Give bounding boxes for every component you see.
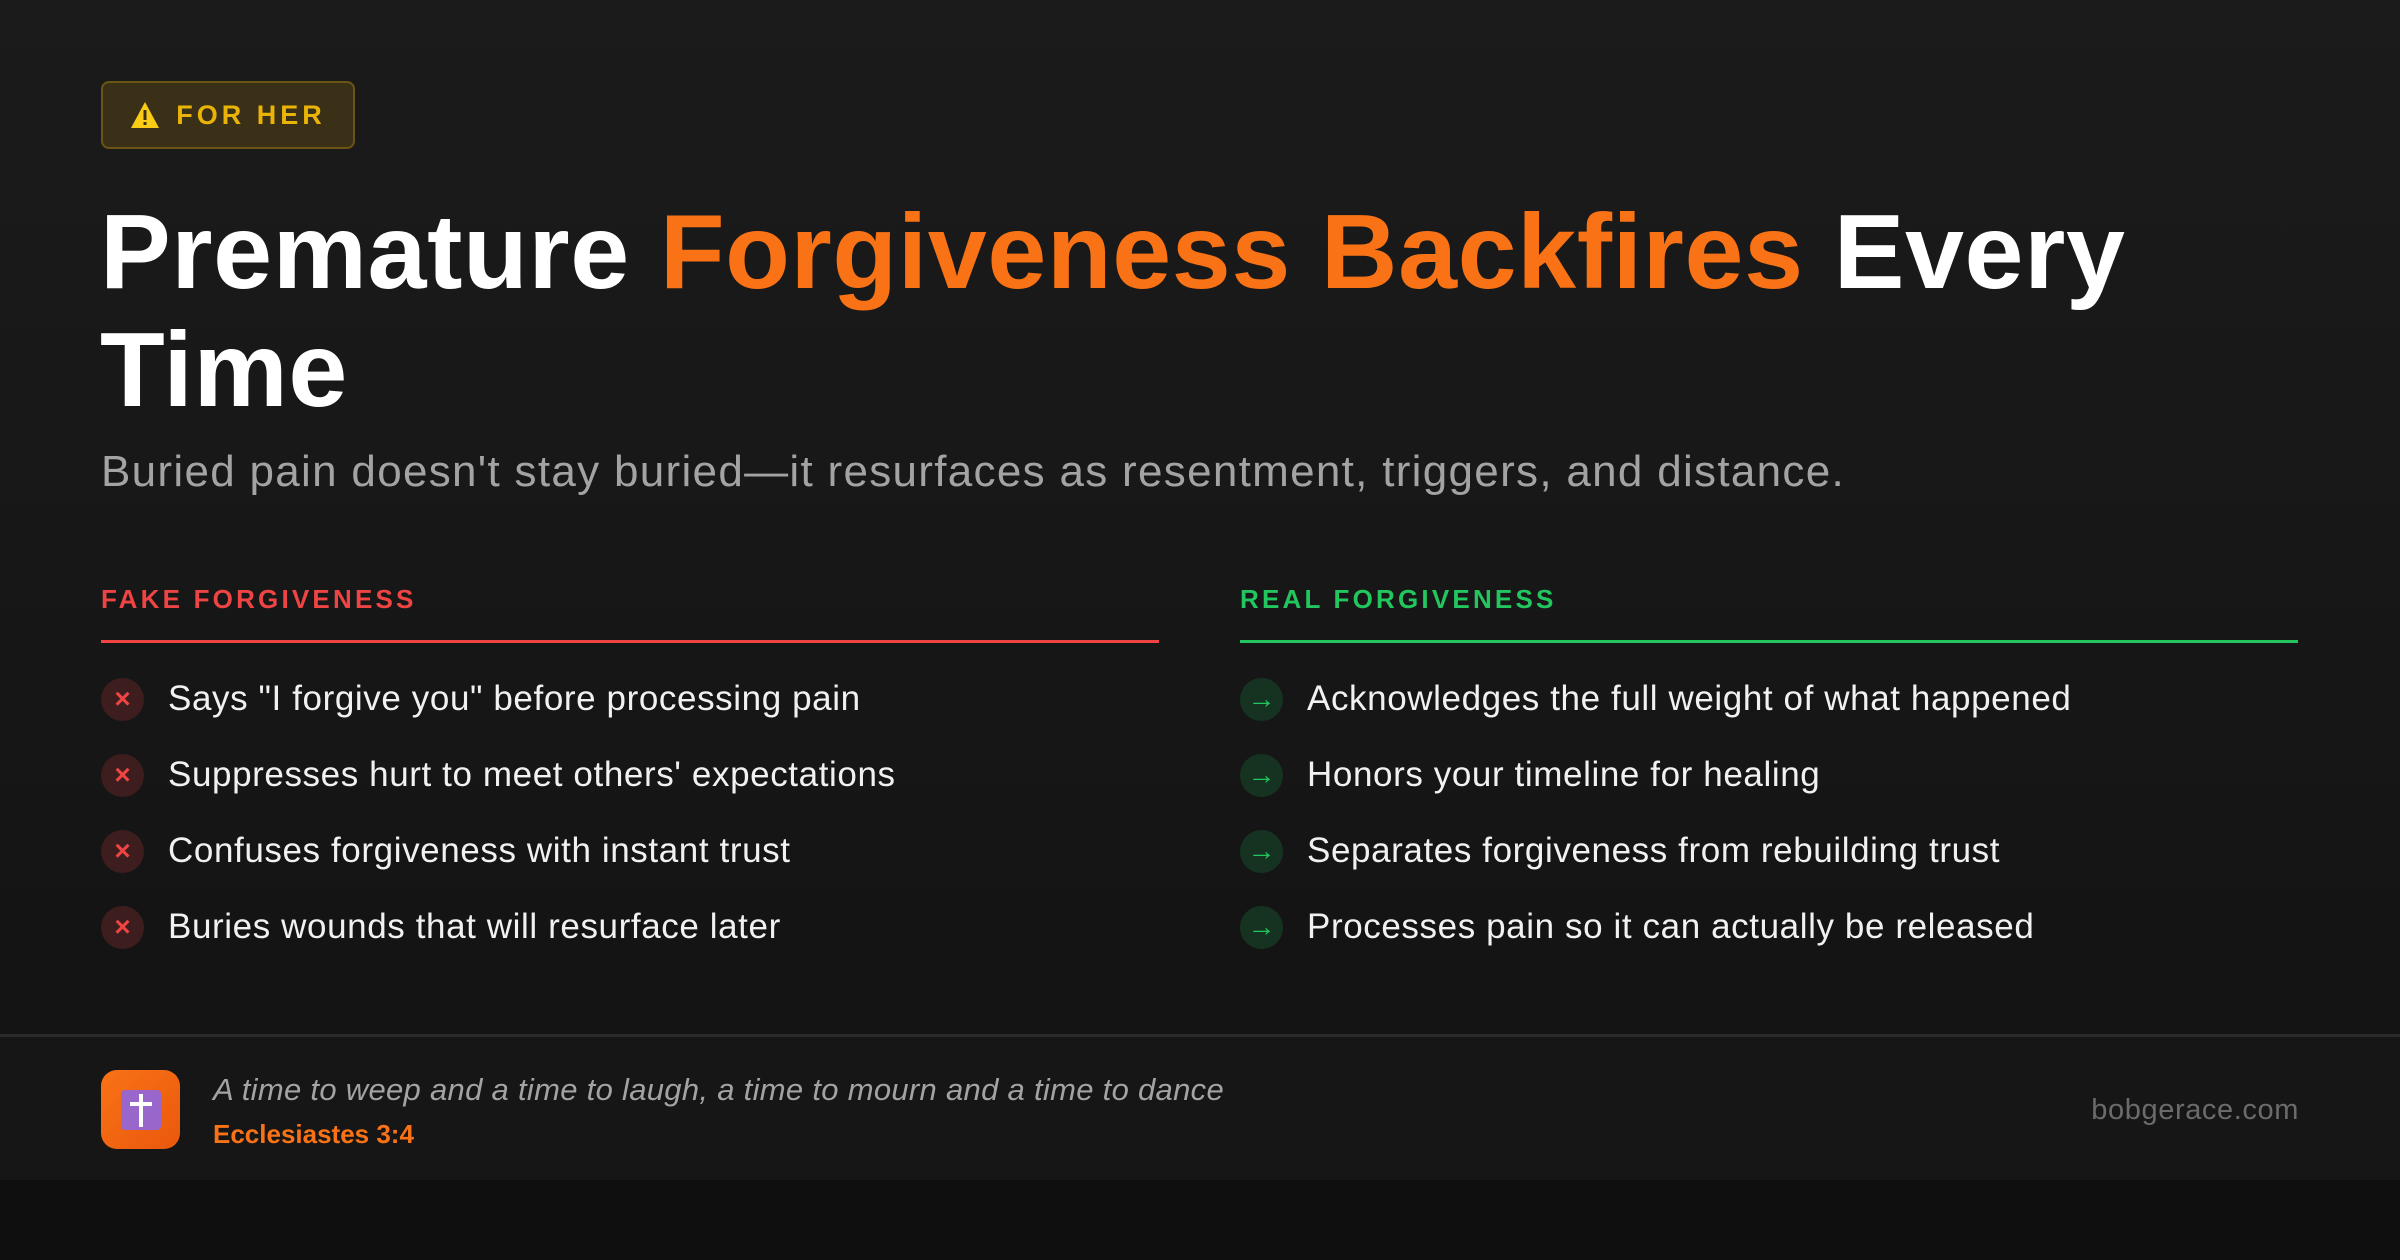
- badge: for her: [101, 81, 355, 149]
- footer: [0, 1034, 2400, 1180]
- quote: A time to weep and a time to laugh, a time to mourn and a time to dance: [213, 1072, 1224, 1107]
- panel: real forgiveness: [1240, 584, 2298, 949]
- panel: fake forgiveness: [101, 584, 1159, 949]
- item: →: [1248, 759, 1276, 790]
- item: →: [1248, 911, 1276, 942]
- item: Confuses forgiveness with instant trust: [168, 831, 791, 870]
- item: ×: [114, 759, 131, 790]
- item: →: [1248, 835, 1276, 866]
- icon: cross: [101, 1070, 180, 1149]
- badge: for her: FOR HER: [176, 100, 326, 130]
- heading: fake forgiveness: FAKE FORGIVENESS: [101, 584, 417, 614]
- title: [100, 193, 2126, 429]
- item: →: [1248, 683, 1276, 714]
- item: ×: [114, 835, 131, 866]
- item: Says "I forgive you" before processing pain: [168, 679, 861, 718]
- heading: fake forgiveness: [101, 584, 1159, 643]
- title: Time: [100, 311, 348, 429]
- item: Suppresses hurt to meet others' expectations: [168, 755, 896, 794]
- item: ×: [114, 683, 131, 714]
- item: ×: [114, 911, 131, 942]
- item: Processes pain so it can actually be released: [1307, 907, 2034, 946]
- item: Separates forgiveness from rebuilding trust: [1307, 831, 2000, 870]
- reference: Ecclesiastes 3:4: [213, 1119, 414, 1149]
- item: Buries wounds that will resurface later: [168, 907, 781, 946]
- item: Acknowledges the full weight of what happened: [1307, 679, 2071, 718]
- title: Premature Forgiveness Backfires Every: [100, 193, 2126, 311]
- heading: real forgiveness: [1240, 584, 2298, 643]
- item: Honors your timeline for healing: [1307, 755, 1820, 794]
- heading: real forgiveness: REAL FORGIVENESS: [1240, 584, 1557, 614]
- subtitle: Buried pain doesn't stay buried—it resurfaces as resentment, triggers, and distance.: [101, 447, 1845, 496]
- website: bobgerace.com: [2091, 1094, 2299, 1126]
